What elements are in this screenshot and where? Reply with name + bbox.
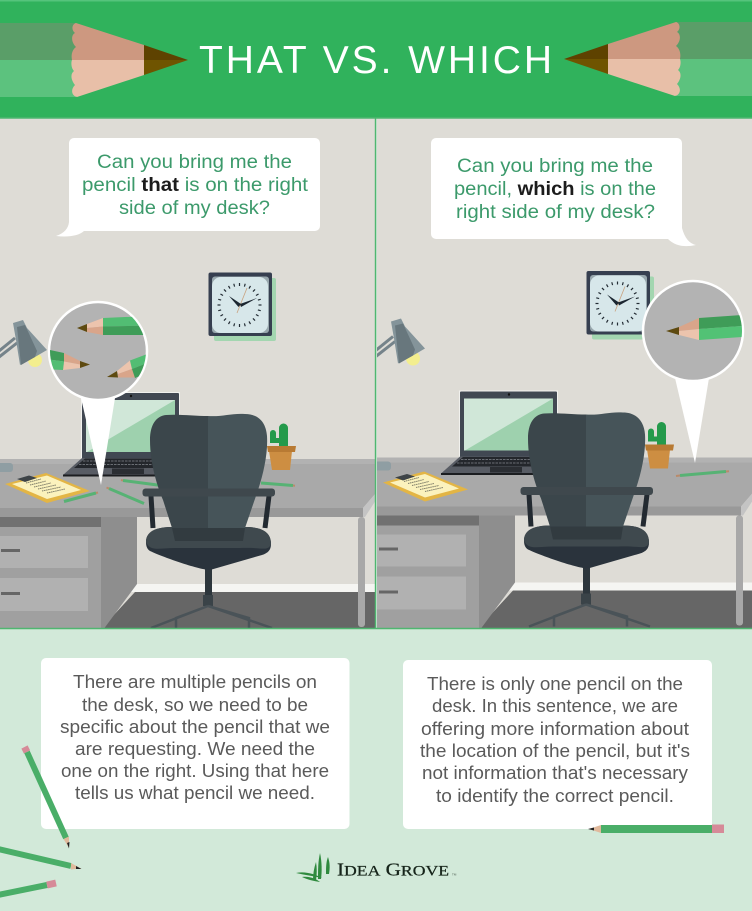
explanation box: that: one on the right. Using that here — [61, 761, 329, 781]
explanation box: that: specific about the pencil that we — [60, 717, 330, 737]
panel: that scene — [0, 118, 390, 630]
desk and room — [0, 118, 390, 630]
explanation box: which: There is only one pencil on the — [427, 674, 683, 694]
panel: which scene — [368, 116, 752, 628]
icon: cactus — [645, 422, 674, 468]
logo: Idea Grove — [296, 853, 457, 882]
explanation box: which — [403, 660, 712, 829]
icon: clipboard — [383, 472, 468, 502]
desk and room — [368, 116, 752, 628]
icon: right pencil — [564, 22, 752, 96]
magnifier circle with three pencils — [44, 302, 150, 400]
icon: office chair — [142, 414, 275, 628]
speech bubble: that: side of my desk? — [119, 198, 270, 219]
magnifier pointer — [81, 398, 115, 485]
icon: pencil lower left — [0, 883, 56, 895]
explanation box: that: the desk, so we need to be — [82, 695, 308, 715]
speech bubble: which — [431, 138, 696, 246]
header banner — [0, 0, 752, 118]
explanation box: which: desk. In this sentence, we are — [432, 696, 678, 716]
explanation box: which: not information that's necessary — [422, 763, 688, 783]
icon: pencil upper left — [24, 747, 70, 848]
icon: office chair — [520, 412, 653, 626]
title: THAT VS. WHICH — [199, 39, 552, 82]
desk pencils — [64, 480, 295, 504]
icon: clipboard — [5, 473, 90, 503]
explanation box: that: are requesting. We need the — [75, 739, 315, 759]
explanation box: that: There are multiple pencils on — [73, 672, 317, 692]
icon: cactus — [267, 424, 296, 470]
icon: left pencil — [0, 23, 188, 97]
icon: pencil middle left — [0, 849, 82, 870]
trademark: TM — [452, 872, 457, 876]
icon: laptop — [63, 392, 180, 476]
speech bubble: that — [56, 138, 320, 236]
icon: pencil lower right — [588, 824, 724, 833]
explanation box: that — [41, 658, 350, 829]
icon: lamp — [372, 318, 425, 366]
icon: laptop — [441, 390, 558, 475]
panel dividers — [0, 118, 752, 629]
magnifier circle with one pencil — [643, 281, 743, 381]
icon: wall clock — [208, 272, 276, 341]
speech bubble: which: pencil, which is on the — [454, 179, 656, 200]
explanation box: which: offering more information about — [421, 719, 689, 739]
speech bubble: that: Can you bring me the — [97, 152, 292, 173]
icon: lamp — [0, 320, 47, 367]
wordmark: IDEA GROVE — [337, 860, 449, 880]
explanation box: which: to identify the correct pencil. — [436, 786, 674, 806]
speech bubble: which: Can you bring me the — [457, 156, 653, 177]
magnifier pointer — [675, 378, 709, 463]
speech bubble: that: pencil that is on the right — [82, 175, 309, 196]
speech bubble: which: right side of my desk? — [456, 202, 655, 223]
explanation box: that: tells us what pencil we need. — [75, 783, 315, 803]
desk pencil — [676, 471, 729, 476]
icon: wall clock — [586, 271, 654, 340]
explanation box: which: the location of the pencil, but it's — [420, 741, 690, 761]
icon: grass mark — [296, 853, 330, 882]
